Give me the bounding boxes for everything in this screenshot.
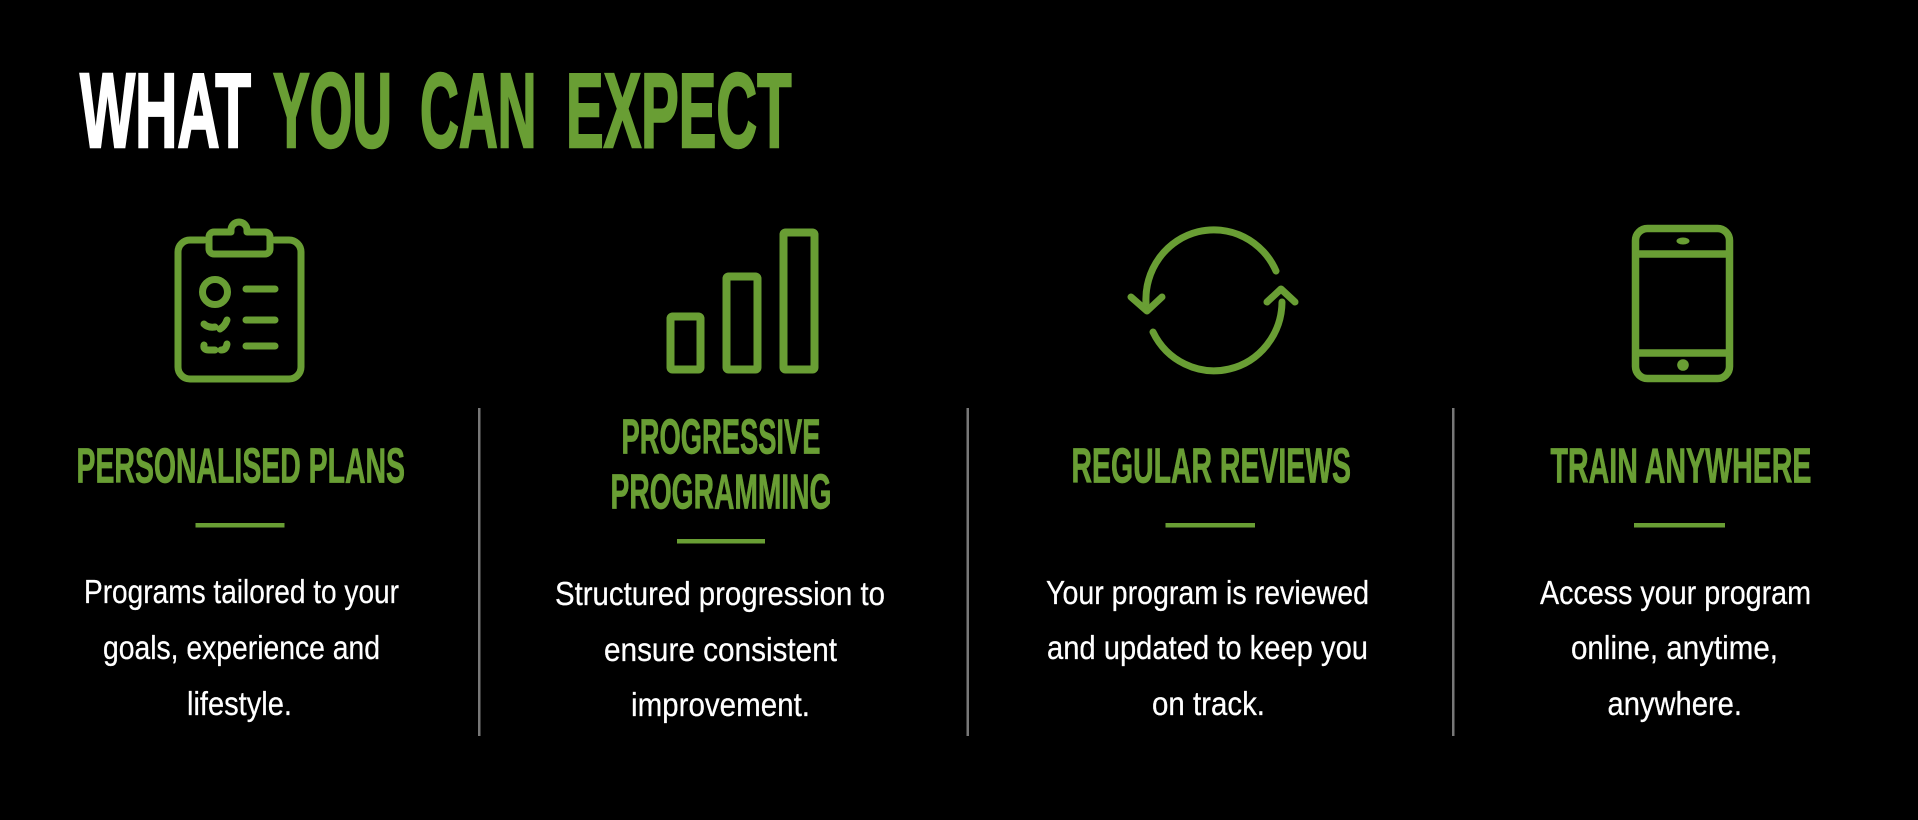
heading: regular reviews: REGULAR REVIEWS [1072,440,1351,494]
text block: Your program is reviewed [1046,574,1369,611]
panel: personalised plans [76,222,405,722]
heading: personalised plans: PERSONALISED PLANS [76,440,405,494]
icon: clipboard [178,222,301,379]
text block: online, anytime, [1571,629,1778,666]
text block [1046,574,1369,722]
icon: bar chart [670,232,814,370]
text block: anywhere. [1608,685,1742,722]
panel: regular reviews [1046,230,1369,722]
heading: progressive programming [610,410,832,520]
icon: cycle arrows [1131,230,1295,371]
text block: improvement. [631,686,810,723]
title: EXPECT [566,52,792,170]
underline [1166,523,1255,528]
title: WHAT [80,52,251,170]
text block [84,573,399,722]
underline [196,523,284,528]
text block: ensure consistent [604,631,837,668]
title [80,52,792,170]
underline [677,539,765,544]
panel: train anywhere [1540,228,1812,722]
panel: progressive programming [555,232,885,723]
heading: progressive programming: PROGRAMMING [610,466,832,520]
icon: smartphone [1636,228,1730,378]
text block: and updated to keep you [1047,629,1368,666]
text block: Programs tailored to your [84,573,399,610]
text block [1540,574,1811,722]
text block [555,575,885,723]
title: CAN [420,52,536,170]
underline [1634,523,1725,528]
text block: Structured progression to [555,575,885,612]
text block: Access your program [1540,574,1811,611]
text block: lifestyle. [187,685,292,722]
heading: progressive programming: PROGRESSIVE [622,410,820,464]
text block: goals, experience and [103,629,380,666]
title: YOU [273,52,392,170]
text block: on track. [1152,685,1265,722]
